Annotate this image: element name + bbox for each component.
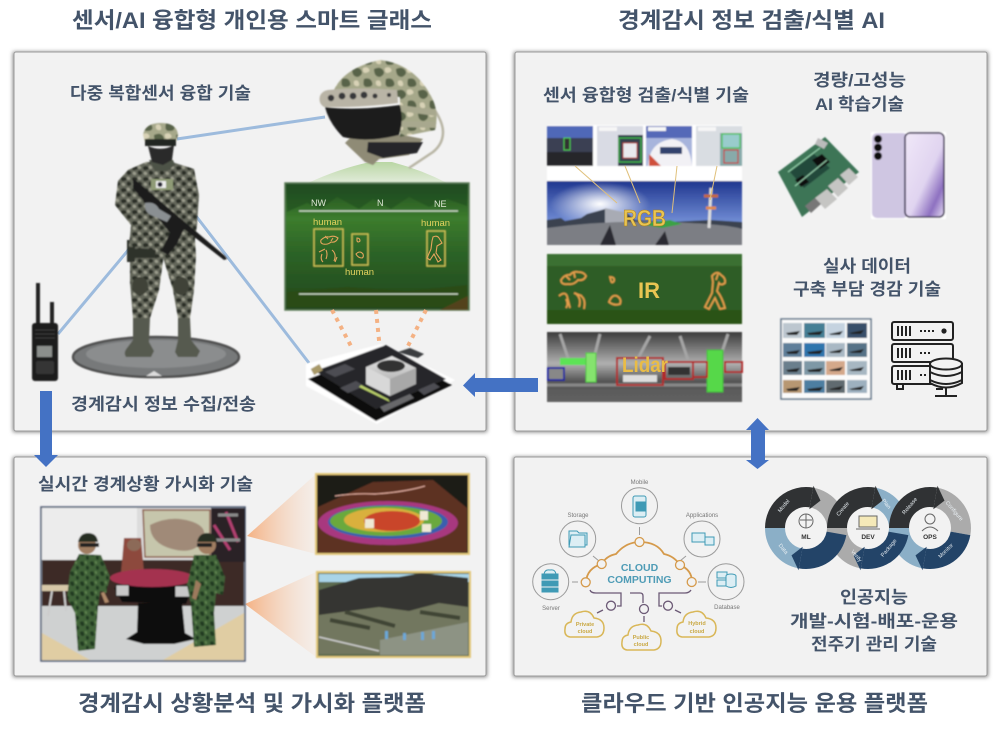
cycle center labels (801, 534, 938, 541)
labels: human (313, 217, 450, 278)
heading: real data (793, 257, 941, 299)
labels: directions (311, 198, 447, 209)
cycle labels: Verify (849, 549, 863, 564)
title: top right: 경계감시 정보 검출/식별 AI (618, 8, 885, 33)
panel: detection AI (514, 52, 988, 432)
labels: services: Applications (686, 513, 718, 519)
cycle center labels: OPS (923, 534, 938, 541)
heading: realtime visualization: 실시간 경계상황 가시화 기술 (38, 475, 253, 494)
cycle labels: Monitor (938, 543, 955, 560)
panel: smart glasses (13, 52, 487, 432)
callouts: orange beams (245, 474, 316, 657)
heading: lightweight AI: AI 학습기술 (815, 95, 904, 114)
icon: soldier on base (73, 123, 239, 377)
cycle labels: Model (777, 499, 791, 514)
small clouds (565, 611, 716, 650)
labels: cloud types (576, 621, 706, 648)
image: terrain heat map (316, 474, 469, 554)
image: embedded board (778, 137, 859, 217)
heading: AI lifecycle: 개발-시험-배포-운용 (790, 612, 958, 631)
title: top left: 센서/AI 융합형 개인용 스마트 글래스 (72, 8, 432, 33)
heading: real data: 실사 데이터 (823, 257, 911, 276)
arrow: left to edge board (463, 373, 538, 397)
heading: AI lifecycle: 인공지능 (840, 588, 908, 607)
arrow: double vertical (746, 418, 769, 469)
diagram: cloud computing (533, 480, 744, 650)
cloud label: CLOUD (621, 562, 659, 574)
image: detection thumbnails (547, 125, 742, 245)
cycle labels: Configure (944, 500, 964, 522)
icon: radio (32, 283, 58, 381)
labels: human: human (421, 218, 450, 229)
cycle labels: Release (901, 497, 919, 516)
heading: AI lifecycle: 전주기 관리 기술 (811, 635, 937, 654)
cycle labels: Package (880, 538, 898, 558)
cycle labels: Create (836, 501, 851, 518)
labels: directions: NE (434, 199, 447, 209)
cycle arrow tips (792, 486, 944, 570)
label: RGB: RGB (623, 205, 666, 231)
image: infrared (547, 254, 742, 324)
labels: cloud types: cloud (690, 629, 704, 635)
heading: multi sensor fusion: 다중 복합센서 융합 기술 (70, 84, 251, 103)
cloud label (607, 562, 672, 586)
figures: thermal outlines (319, 236, 442, 262)
image: lidar (547, 332, 742, 402)
cloud links (590, 590, 691, 622)
title: bottom right: 클라우드 기반 인공지능 운용 플랫폼 (581, 691, 928, 716)
labels: directions: N (377, 198, 384, 208)
panel: situation visualization (13, 457, 487, 677)
heading: sensor fusion detection: 센서 융합형 검출/식별 기술 (543, 86, 749, 105)
labels: services: Database (714, 605, 741, 611)
icon: server and database (892, 322, 962, 396)
labels: cloud types: cloud (634, 642, 648, 648)
labels: human: human (313, 217, 342, 228)
connector lines (58, 117, 325, 363)
labels: human: human (345, 267, 374, 278)
cycle center icons (799, 514, 938, 531)
image: smartphone (871, 132, 946, 219)
labels: cloud types: Public (633, 635, 649, 641)
arrow: down to visualization (34, 391, 58, 467)
cycle center labels: DEV (861, 534, 875, 541)
cycle labels (777, 497, 964, 564)
icon: smart helmet (320, 60, 443, 168)
cloud nodes (581, 538, 696, 614)
screen: detection view (285, 183, 469, 310)
image: command room scene (41, 507, 245, 661)
connector lines: thumbnails to panorama (575, 166, 717, 213)
dotted links (332, 310, 426, 350)
labels: cloud types: cloud (578, 629, 592, 635)
labels: directions: NW (311, 198, 326, 208)
glow above screen (308, 162, 447, 183)
heading: lightweight AI: 경량/고성능 (813, 71, 906, 90)
heading: real data: 구축 부담 경감 기술 (793, 280, 941, 299)
icon: edge board (306, 344, 455, 424)
labels: cloud types: Hybrid (688, 621, 706, 627)
cycle labels: Plan (880, 498, 892, 511)
labels: services: Storage (567, 513, 589, 519)
heading: lightweight AI (813, 71, 906, 114)
cloud outline (586, 542, 692, 582)
cloud label: COMPUTING (607, 574, 672, 586)
heading: AI lifecycle (790, 588, 958, 654)
label: Lidar: Lidar (622, 354, 668, 377)
diagram: ML DEV OPS cycle (775, 486, 964, 570)
icons: services (542, 496, 736, 592)
image: satellite mountains (317, 572, 470, 657)
heading: collect and transmit: 경계감시 정보 수집/전송 (71, 395, 256, 414)
labels: services: Mobile (631, 480, 649, 486)
labels: services: Server (542, 606, 560, 612)
image: ship dataset (781, 319, 871, 399)
cycle center labels: ML (801, 534, 811, 541)
labels: services (542, 480, 741, 612)
cycle labels: Data (777, 543, 789, 556)
title: bottom left: 경계감시 상황분석 및 가시화 플랫폼 (78, 691, 426, 716)
panel: cloud AI operations (513, 457, 988, 677)
labels: cloud types: Private (576, 622, 594, 628)
label: IR: IR (638, 278, 660, 303)
